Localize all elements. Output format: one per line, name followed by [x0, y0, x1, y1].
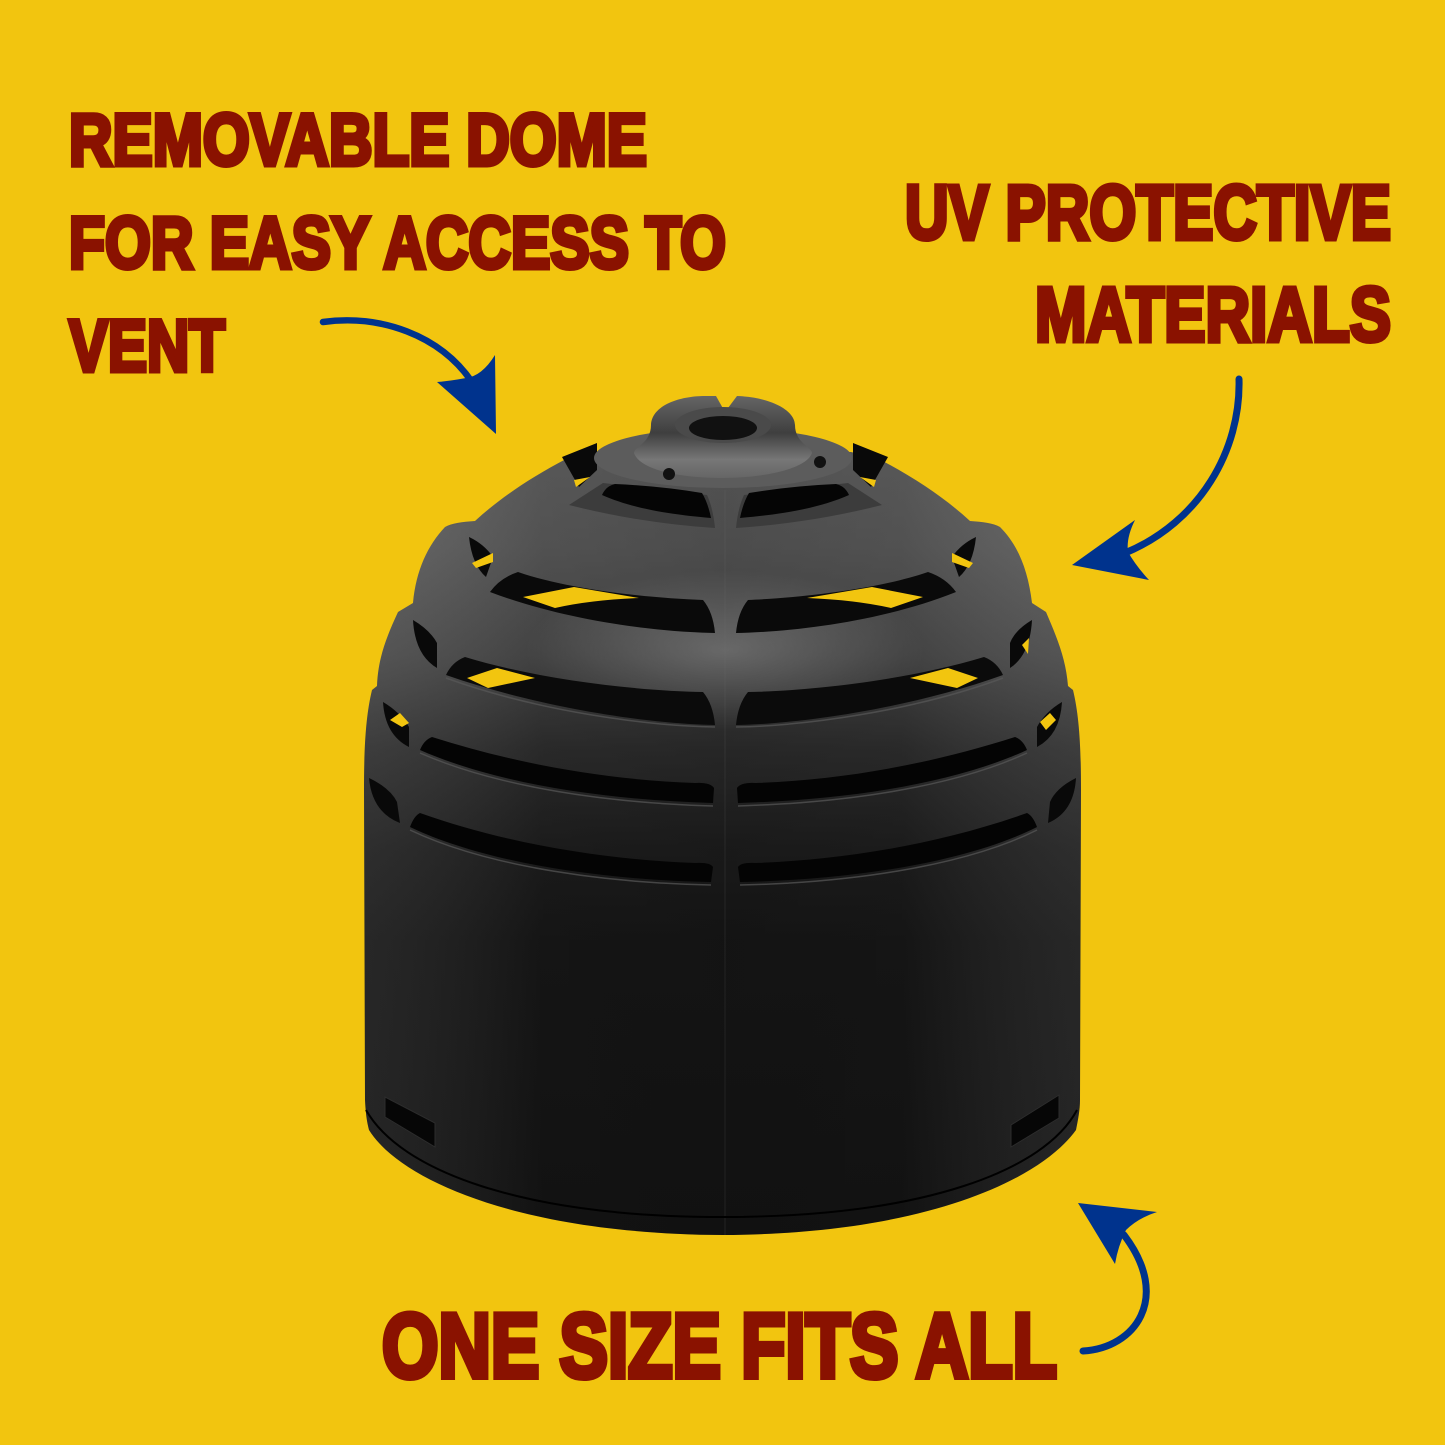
base clip windows: [385, 1095, 1059, 1147]
top row slots: [569, 483, 882, 528]
product: vent dome: [364, 396, 1081, 1235]
side windows: [369, 443, 1076, 823]
arrow: to dome: [323, 320, 496, 434]
top disc: [594, 428, 852, 488]
row 4 slots: [420, 737, 1027, 803]
base lip line: [366, 1110, 1077, 1217]
mounting holes: [663, 456, 826, 480]
stem: [634, 396, 812, 478]
highlight glow: [525, 570, 925, 730]
row 3 slots: [446, 657, 1003, 725]
dome silhouette: [364, 452, 1081, 1235]
arrow: to base: [1078, 1203, 1157, 1351]
row 5 slots: [410, 813, 1037, 882]
side shading: [364, 452, 1081, 1235]
tier lip lines: [410, 490, 1037, 1235]
heading: removable dome: [69, 100, 726, 387]
stem opening: [675, 407, 771, 443]
heading: UV protective materials: [905, 170, 1391, 358]
heading: one size fits all: ONE SIZE FITS ALL: [382, 1296, 1057, 1397]
heading: removable dome: REMOVABLE DOME: [69, 100, 647, 181]
stem center hole: [689, 416, 757, 440]
row 2 slots: [490, 572, 956, 633]
heading: removable dome: VENT: [69, 306, 225, 387]
arrow: to materials: [1072, 379, 1239, 580]
heading: removable dome: FOR EASY ACCESS TO: [69, 203, 726, 284]
